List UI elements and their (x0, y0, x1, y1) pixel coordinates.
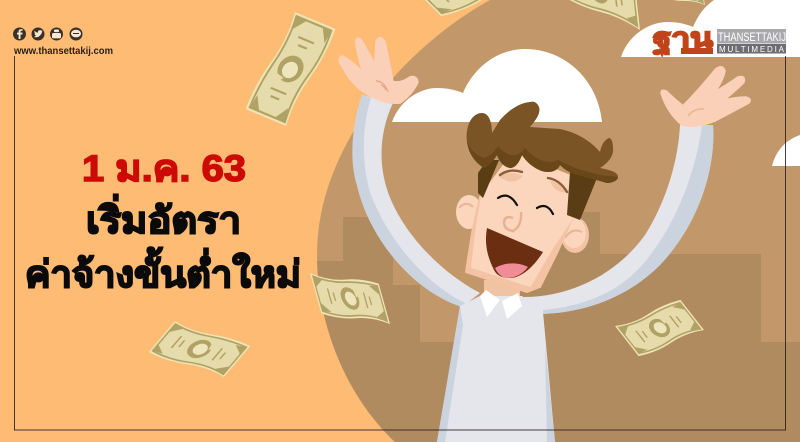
bill: top centre left (413, 0, 521, 18)
cloud: behind logo (621, 0, 800, 57)
bill: lower right (615, 298, 704, 358)
panel: brown backdrop with city skyline (300, 0, 800, 442)
eyebrows (500, 171, 567, 192)
face (466, 153, 573, 292)
bill: lower left (147, 321, 252, 377)
cloud: right edge (772, 135, 800, 166)
logo: thansettakij (653, 23, 786, 56)
left ear (456, 195, 482, 229)
hair shadow (467, 142, 618, 183)
bill: top right (660, 0, 705, 5)
bill: middle (310, 273, 390, 324)
back hair (478, 160, 597, 220)
website url: www.thansettakij.com (13, 45, 113, 57)
social icons (13, 28, 82, 40)
logo: thansettakij: MULTIMEDIA (719, 45, 785, 54)
bill: large top left (243, 12, 338, 126)
title: line 3: ค่าจ้างขั้นต่ำใหม่ (25, 247, 301, 295)
title: line 2: เริ่มอัตรา (86, 194, 241, 241)
bill: top centre (555, 0, 640, 30)
left hand (340, 38, 417, 102)
right sleeve (520, 125, 713, 314)
title: date: 1 ม.ค. 63 (82, 148, 246, 189)
hair (467, 102, 618, 183)
nose (504, 212, 521, 231)
neck (484, 280, 520, 302)
illustration: cheering man (340, 38, 749, 442)
cloud: centre (392, 49, 602, 122)
logo: thansettakij: ฐาน (653, 23, 714, 56)
left sleeve (352, 95, 480, 307)
torso (437, 296, 555, 442)
collar (480, 290, 522, 319)
logo: thansettakij: THANSETTAKIJ (718, 32, 786, 44)
right ear (561, 217, 589, 253)
right hand (662, 68, 749, 125)
eyes (498, 196, 553, 214)
mouth (486, 228, 543, 278)
